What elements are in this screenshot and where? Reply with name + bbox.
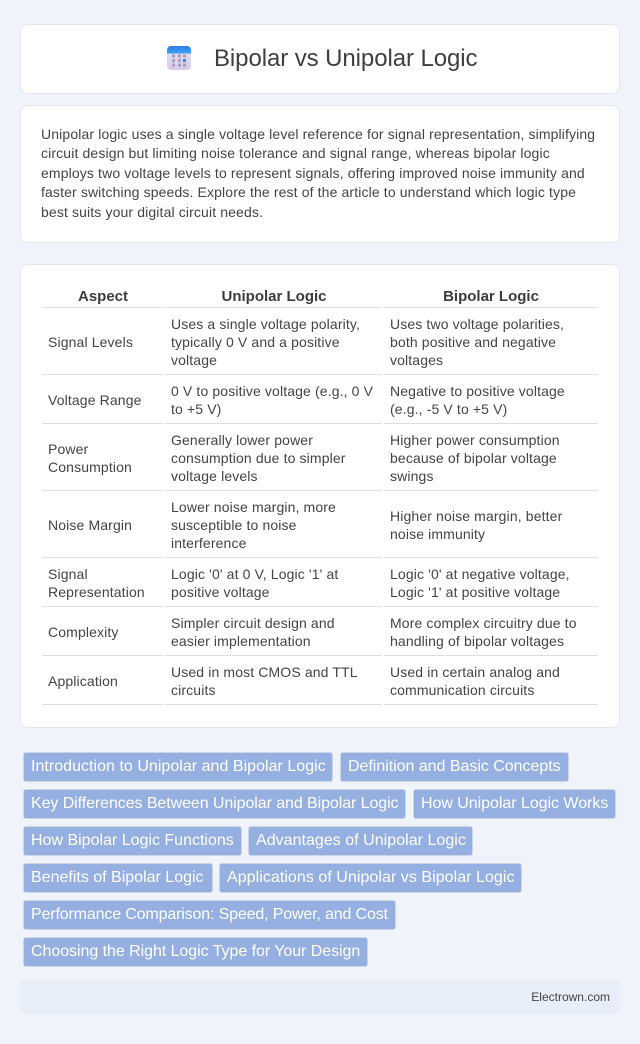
text block: introduction: best suits your digital circuit needs. [41, 204, 263, 220]
row: complexity: easier implementation [171, 633, 311, 649]
row: signal representation: Logic '0' at negative voltage, [390, 566, 570, 582]
row: noise margin [42, 499, 598, 558]
row: power consumption: Generally lower power [171, 432, 313, 448]
chip: advantages: Advantages of Unipolar Logic [256, 832, 466, 849]
table header: Unipolar Logic [222, 288, 326, 305]
row: application: communication circuits [390, 682, 534, 698]
chip: key differences: Key Differences Between Unipolar and Bipolar Logic [31, 795, 398, 812]
row: noise margin: susceptible to noise [171, 517, 297, 533]
chip: how bipolar functions: How Bipolar Logic Functions [31, 832, 234, 849]
chip: choosing: Choosing the Right Logic Type for Your Design [31, 943, 360, 960]
row: complexity: More complex circuitry due to [390, 615, 577, 631]
row: power consumption: because of bipolar voltage [390, 450, 557, 466]
row: complexity: handling of bipolar voltages [390, 633, 564, 649]
row: signal levels: Signal Levels [48, 334, 133, 350]
row: signal levels: typically 0 V and a positive [171, 334, 340, 350]
row: power consumption: Consumption [48, 459, 132, 475]
row: power consumption: consumption due to simpler [171, 450, 346, 466]
table header: Aspect [78, 288, 128, 305]
chip: benefits [23, 863, 213, 893]
row: noise margin: Noise Margin [48, 517, 132, 533]
row: voltage range: Voltage Range [48, 392, 142, 408]
row: voltage range: Negative to positive voltage [390, 383, 565, 399]
chip: how unipolar works: How Unipolar Logic Works [421, 795, 608, 812]
row: signal representation: positive voltage [171, 584, 270, 600]
chip: key differences [23, 789, 406, 819]
panel: comparison table [20, 264, 620, 728]
chip: introduction: Introduction to Unipolar and Bipolar Logic [31, 758, 326, 775]
row: application: circuits [171, 682, 216, 698]
text block: introduction: faster switching speeds. Explore the rest of the article to understand which logic type [41, 184, 576, 200]
row: power consumption: Higher power consumption [390, 432, 560, 448]
row: signal representation: Signal [48, 566, 88, 582]
chip: how bipolar functions [23, 826, 242, 856]
row: power consumption: voltage levels [171, 468, 258, 484]
row: application [42, 664, 598, 705]
chip: applications [219, 863, 522, 893]
text block: introduction: Unipolar logic uses a single voltage level reference for signal representation, simplifying [41, 126, 595, 142]
row: application: Application [48, 673, 118, 689]
panel: introduction [20, 105, 620, 243]
chip: applications: Applications of Unipolar vs Bipolar Logic [227, 869, 515, 886]
row: signal representation [42, 566, 598, 607]
row: noise margin: Lower noise margin, more [171, 499, 336, 515]
table header: Bipolar Logic [443, 288, 539, 305]
row: signal levels: voltages [390, 352, 443, 368]
title: Bipolar vs Unipolar Logic [214, 45, 477, 72]
row: signal representation: Logic '1' at positive voltage [390, 584, 560, 600]
chip: performance: Performance Comparison: Speed, Power, and Cost [31, 906, 388, 923]
row: signal levels [42, 316, 598, 375]
row: signal representation: Logic '0' at 0 V, Logic '1' at [171, 566, 338, 582]
row: power consumption [42, 432, 598, 491]
row: complexity: Complexity [48, 624, 119, 640]
text block: introduction: circuit design but limiting noise tolerance and signal range, whereas bipolar logic [41, 145, 550, 161]
chip: definition [340, 752, 569, 782]
row: voltage range: (e.g., -5 V to +5 V) [390, 401, 507, 417]
panel: topic links [23, 752, 616, 967]
chip: performance [23, 900, 396, 930]
footer [20, 980, 620, 1014]
text block: introduction [41, 126, 595, 220]
chip: introduction [23, 752, 333, 782]
text block: introduction: employs two voltage levels to represent signals, offering improved noise immunity and [41, 165, 585, 181]
row: signal levels: both positive and negative [390, 334, 556, 350]
row: signal levels: Uses a single voltage polarity, [171, 316, 360, 332]
row: signal levels: Uses two voltage polarities, [390, 316, 564, 332]
row: signal levels: voltage [171, 352, 217, 368]
chip: how unipolar works [413, 789, 616, 819]
icon: calendar [167, 46, 191, 70]
row: voltage range: to +5 V) [171, 401, 221, 417]
row: complexity: Simpler circuit design and [171, 615, 335, 631]
row: application: Used in certain analog and [390, 664, 560, 680]
panel: header [20, 24, 620, 94]
row: power consumption: swings [390, 468, 434, 484]
footer source text: Electrown.com [531, 990, 610, 1004]
row: application: Used in most CMOS and TTL [171, 664, 358, 680]
row: noise margin: noise immunity [390, 526, 485, 542]
row: complexity [42, 615, 598, 656]
chip: choosing [23, 937, 368, 967]
row: signal representation: Representation [48, 584, 145, 600]
row: noise margin: interference [171, 535, 246, 551]
table header [42, 288, 598, 308]
chip: benefits: Benefits of Bipolar Logic [31, 869, 204, 886]
row: voltage range: 0 V to positive voltage (e.g., 0 V [171, 383, 373, 399]
chip: definition: Definition and Basic Concepts [348, 758, 561, 775]
chip: advantages [248, 826, 473, 856]
row: voltage range [42, 383, 598, 424]
row: power consumption: Power [48, 441, 88, 457]
row: noise margin: Higher noise margin, better [390, 508, 562, 524]
